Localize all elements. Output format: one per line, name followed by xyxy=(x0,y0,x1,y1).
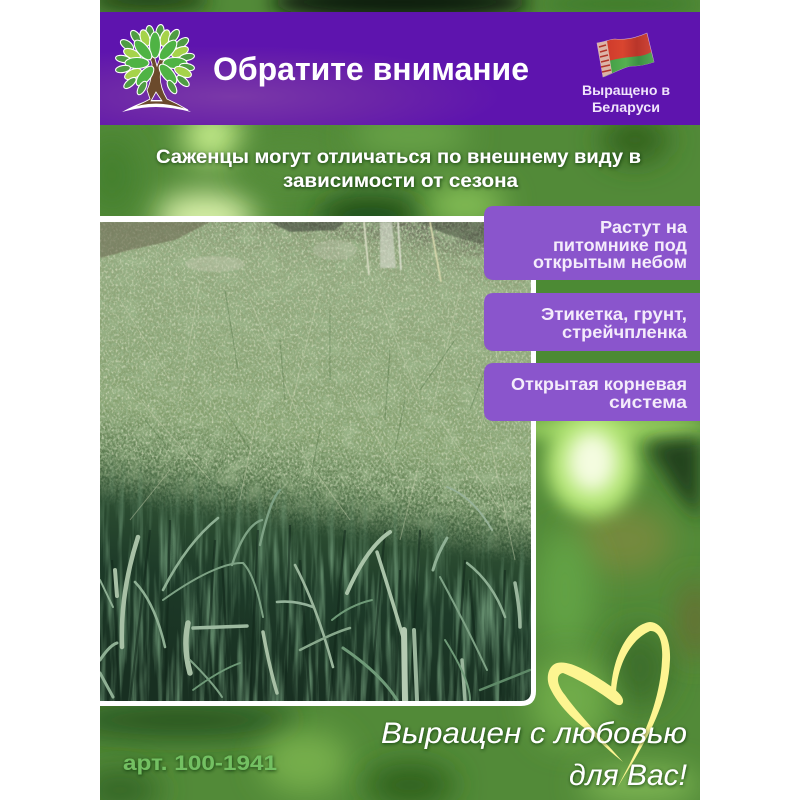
photo frame xyxy=(100,216,536,706)
caption: grown in Belarus: Беларуси xyxy=(592,100,660,115)
info box: packaging xyxy=(484,293,700,351)
caption: grown in Belarus xyxy=(582,83,670,115)
info box: packaging: стрейчпленка xyxy=(562,322,687,342)
grass leaves xyxy=(100,487,530,700)
background strip behind grass xyxy=(100,222,484,282)
caption: grown in Belarus: Выращено в xyxy=(582,83,670,98)
photo: ornamental grass xyxy=(100,222,531,701)
info box: root system: Открытая корневая xyxy=(511,374,687,394)
info box: nursery: открытым небом xyxy=(533,252,687,272)
info box: nursery xyxy=(484,206,700,280)
infographic poster xyxy=(100,0,700,800)
slogan: для Вас! xyxy=(569,759,688,792)
info box: nursery: Растут на xyxy=(600,217,687,237)
logo: tree xyxy=(115,24,195,112)
info box: root system xyxy=(484,363,700,421)
info box: nursery: питомнике под xyxy=(553,235,687,255)
header band xyxy=(100,12,700,125)
slogan: Выращен с любовью xyxy=(381,717,687,750)
grass stems xyxy=(112,520,505,701)
thin seed-head strands xyxy=(120,280,515,560)
notice text xyxy=(156,146,641,192)
title: Обратите внимание xyxy=(213,51,529,87)
slogan xyxy=(381,717,688,792)
article number: арт. 100-1941 xyxy=(123,752,277,775)
notice text: зависимости от сезона xyxy=(283,170,518,192)
notice text: Саженцы могут отличаться по внешнему виду в xyxy=(156,146,641,168)
icon: Belarus flag xyxy=(597,33,654,77)
info box: packaging: Этикетка, грунт, xyxy=(541,304,687,324)
info box: root system: система xyxy=(609,392,687,412)
icon: yellow heart xyxy=(548,622,670,788)
